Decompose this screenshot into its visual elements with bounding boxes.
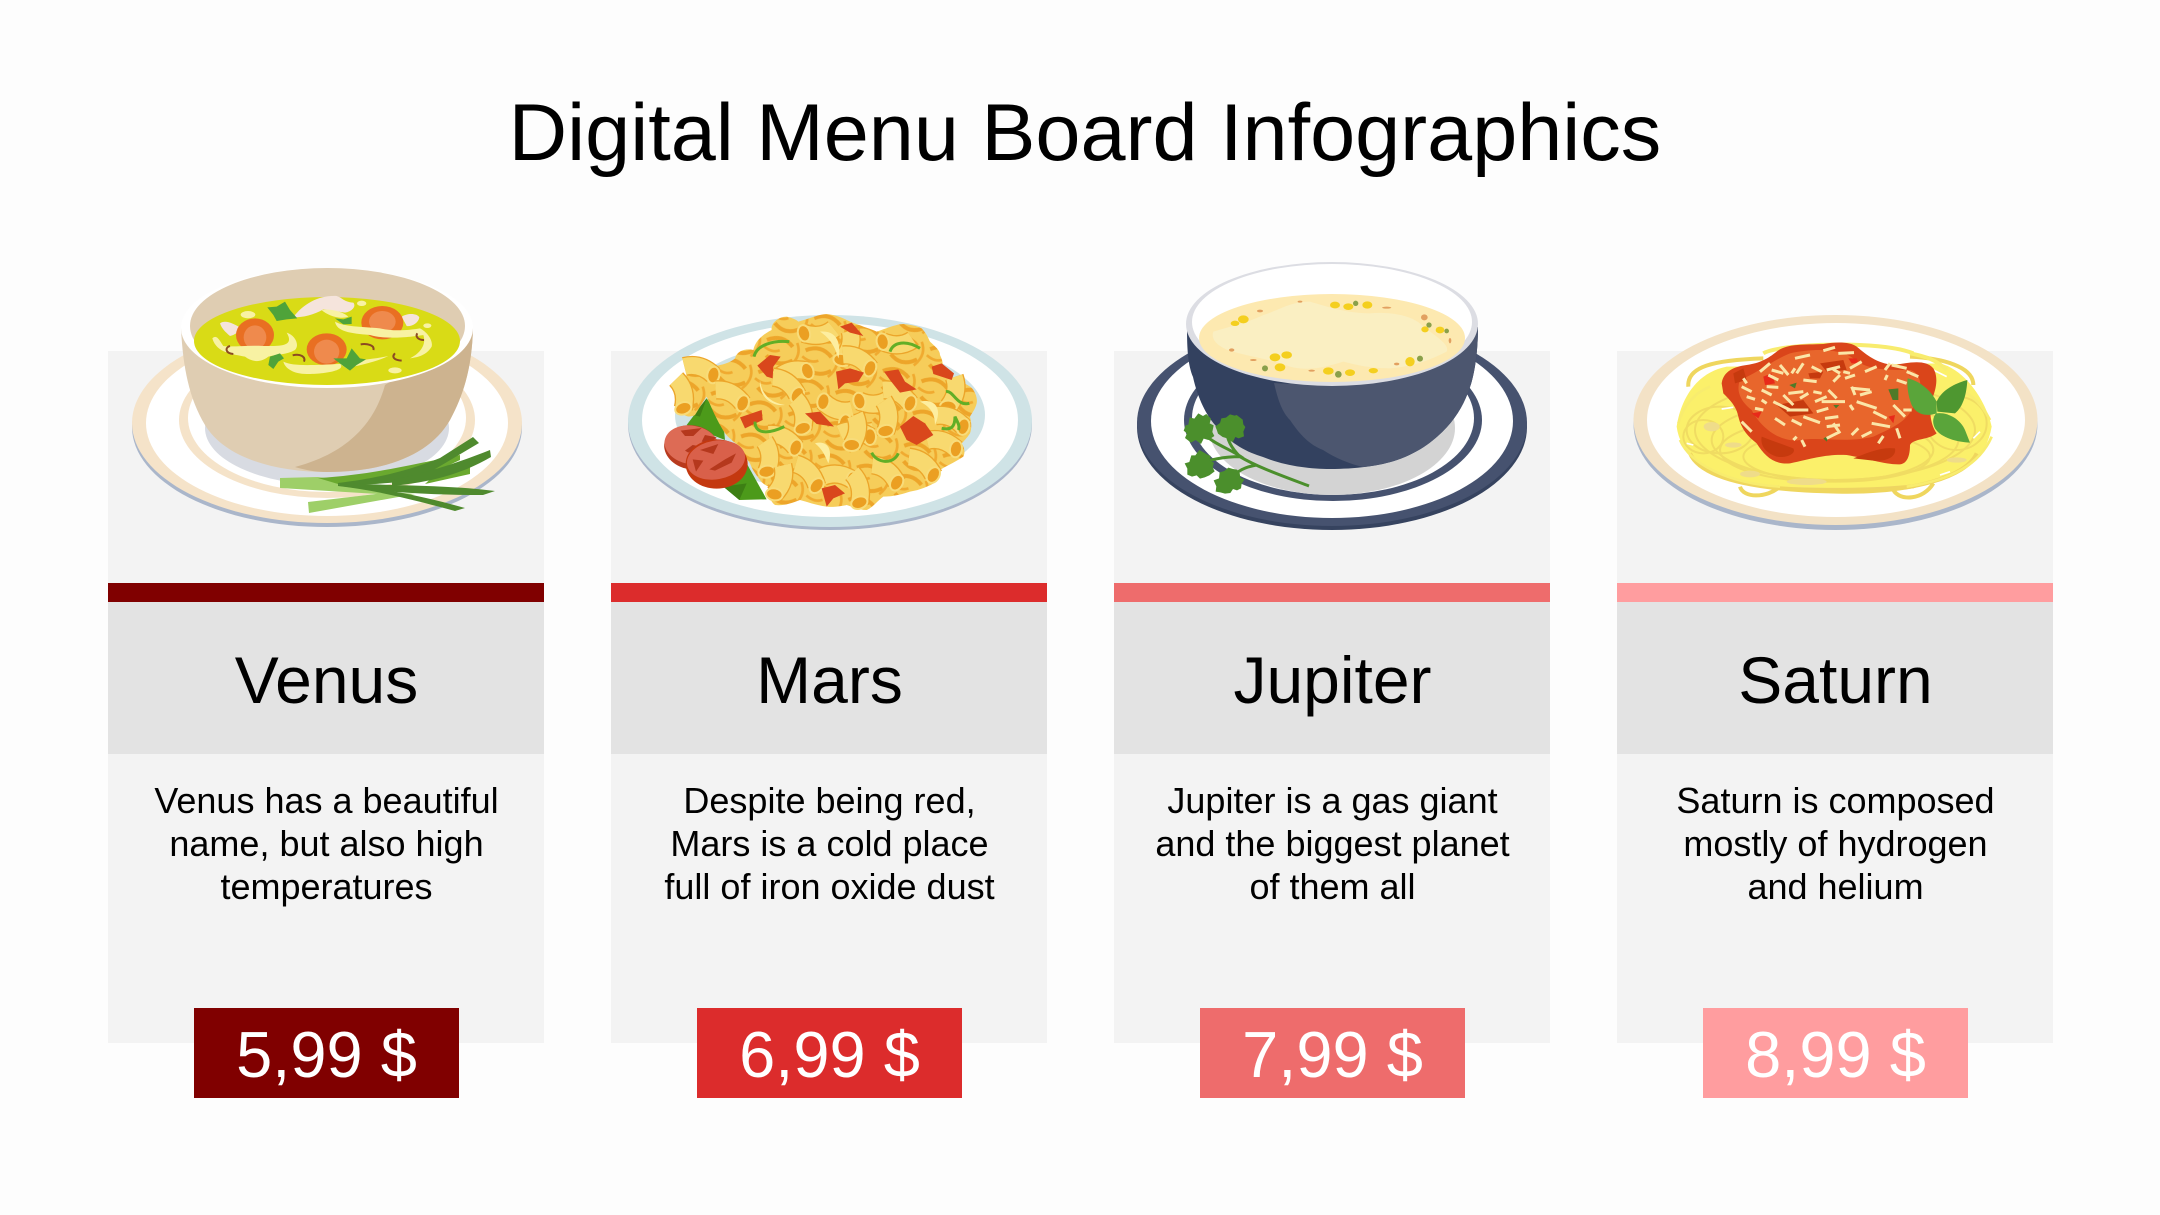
text block: Venus description: Venus has a beautiful xyxy=(154,780,499,821)
text block: Saturn description: and helium xyxy=(1747,866,1924,907)
price tag: Saturn xyxy=(1703,1008,1968,1098)
price tag: Mars: 6,99 $ xyxy=(739,1018,920,1091)
price tag: Saturn: 8,99 $ xyxy=(1745,1018,1926,1091)
heading: Jupiter: Jupiter xyxy=(1233,643,1432,717)
text block: Mars description: Despite being red, xyxy=(683,780,976,821)
text block: Venus description: name, but also high xyxy=(169,823,484,864)
price tag: Mars xyxy=(697,1008,962,1098)
text block: Saturn description xyxy=(1676,780,1995,907)
panel: Saturn xyxy=(1617,315,2053,1098)
icon: corn soup bowl xyxy=(1137,262,1527,530)
icon: spaghetti plate xyxy=(1634,315,2038,530)
heading: Saturn: Saturn xyxy=(1738,643,1933,717)
price tag: Venus: 5,99 $ xyxy=(236,1018,417,1091)
title: Digital Menu Board Infographics xyxy=(509,88,1661,178)
text block: Saturn description: Saturn is composed xyxy=(1676,780,1995,821)
text block: Mars description xyxy=(664,780,995,907)
text block: Mars description: Mars is a cold place xyxy=(670,823,989,864)
heading: Venus: Venus xyxy=(235,643,418,717)
price tag: Jupiter xyxy=(1200,1008,1465,1098)
text block: Mars description: full of iron oxide dust xyxy=(664,866,995,907)
text block: Jupiter description: and the biggest planet xyxy=(1155,823,1510,864)
text block: Jupiter description: of them all xyxy=(1249,866,1416,907)
text block: Venus description xyxy=(154,780,499,907)
panel: Mars xyxy=(611,314,1047,1098)
panel: Venus xyxy=(108,268,544,1098)
text block: Jupiter description: Jupiter is a gas giant xyxy=(1167,780,1498,821)
icon: vegetable soup bowl xyxy=(132,268,522,527)
panel: Jupiter xyxy=(1114,262,1550,1098)
text block: Venus description: temperatures xyxy=(220,866,433,907)
text block: Jupiter description xyxy=(1155,780,1510,907)
icon: macaroni plate xyxy=(628,314,1032,530)
price tag: Venus xyxy=(194,1008,459,1098)
heading: Mars: Mars xyxy=(756,643,903,717)
price tag: Jupiter: 7,99 $ xyxy=(1242,1018,1423,1091)
text block: Saturn description: mostly of hydrogen xyxy=(1683,823,1988,864)
